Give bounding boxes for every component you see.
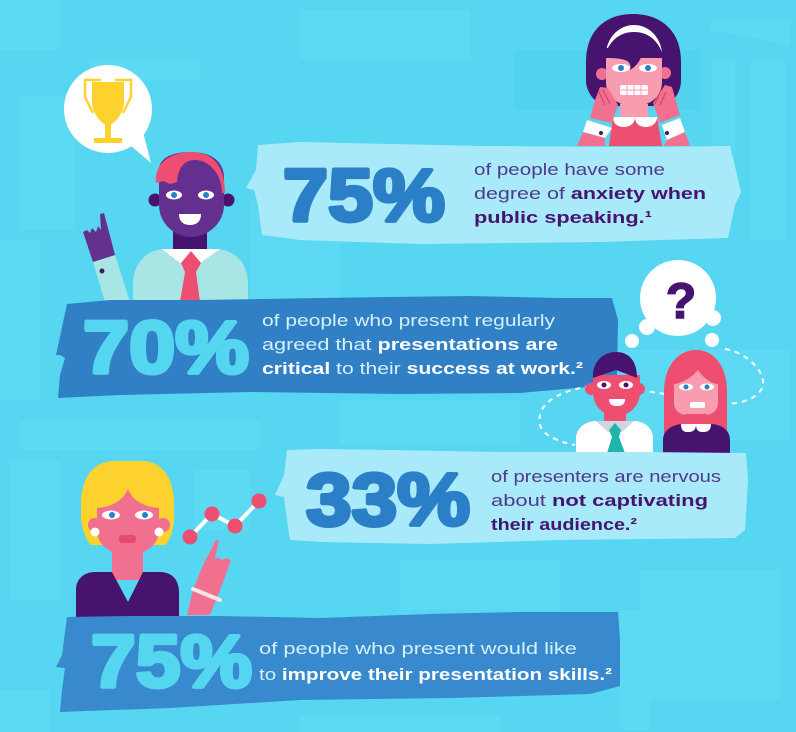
text: anxiety statement [474, 160, 706, 227]
character: blonde woman [76, 461, 231, 617]
character: man with teal tie [576, 352, 653, 453]
icon: question thought bubble [625, 260, 721, 348]
text: improve skills statement: of people who present would like [259, 639, 577, 658]
statistic: 33 percent: 33% [306, 458, 470, 541]
text: nervous presenters statement: of presenters are nervous [491, 467, 721, 486]
text: anxiety statement: degree of anxiety when [474, 184, 706, 203]
statistic: 70 percent: 70% [83, 306, 249, 389]
text: anxiety statement: of people have some [474, 160, 665, 179]
text: critical to success statement: agreed that presentations are [262, 335, 558, 354]
panel: 75% improve skills [56, 612, 620, 712]
character: woman with pink hair [663, 350, 730, 453]
text: critical to success statement: of people who present regularly [262, 311, 556, 330]
icon: line chart [182, 494, 266, 544]
character: anxious woman [577, 14, 690, 146]
text: critical to success statement [262, 311, 583, 378]
panel: 75% anxiety [246, 142, 741, 244]
icon: trophy speech bubble [64, 65, 152, 163]
panel: 70% critical to success [56, 296, 618, 398]
text: nervous presenters statement [491, 467, 721, 534]
statistic: 75 percent: 75% [283, 154, 445, 237]
text: improve skills statement: to improve their presentation skills.² [259, 665, 612, 684]
text: nervous presenters statement: their audience.² [491, 515, 637, 534]
text: nervous presenters statement: about not captivating [491, 491, 708, 510]
dashed connection loop [539, 349, 763, 445]
text: critical to success statement: critical to their success at work.² [262, 359, 583, 378]
statistic: 75 percent improve: 75% [91, 620, 252, 703]
text: improve skills statement [259, 639, 612, 684]
panel: 33% nervous presenters [275, 449, 748, 544]
character: smiling man [83, 152, 248, 302]
icon: question thought bubble: ? [666, 273, 696, 329]
text: anxiety statement: public speaking.¹ [474, 208, 652, 227]
